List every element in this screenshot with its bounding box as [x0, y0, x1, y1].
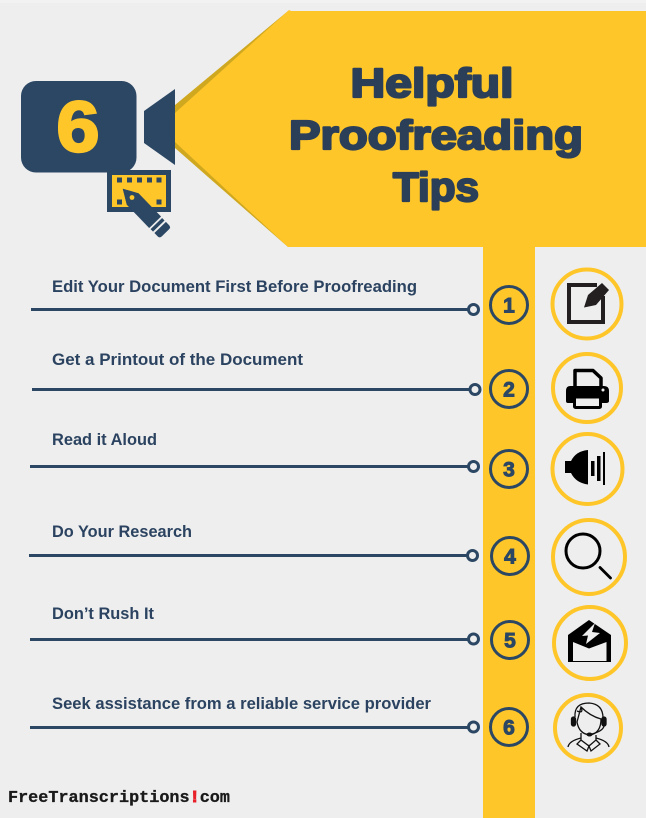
icon: edit note: [552, 270, 622, 338]
tip 2: [32, 350, 480, 394]
number badge 1: 1: [503, 294, 515, 318]
title: Proofreading: [289, 112, 583, 158]
number badge 6: [490, 708, 528, 746]
yellow vertical column: [483, 240, 535, 818]
number badge 6: 6: [503, 716, 515, 740]
icon: speaker: [552, 434, 622, 504]
icon: printer: [553, 354, 621, 422]
icon: video camera with number 6: 6: [56, 88, 100, 168]
icon: envelope with lightning: [554, 607, 626, 679]
number badge 4: 4: [504, 546, 516, 568]
number badge 1: [490, 286, 528, 324]
number badge 3: 3: [503, 458, 515, 482]
tip 1: Edit Your Document First Before Proofreading: [52, 277, 417, 296]
tip 5: Don’t Rush It: [52, 604, 154, 623]
icon: support agent: [555, 695, 621, 761]
number badge 4: [492, 538, 528, 574]
tip 4: [29, 522, 478, 560]
tip 4: Do Your Research: [52, 522, 192, 541]
tip 5: [30, 604, 478, 644]
number badge 5: [492, 622, 528, 658]
title: [289, 60, 583, 210]
icon: video camera with number 6: [21, 81, 175, 172]
tip 6: Seek assistance from a reliable service provider: [52, 694, 431, 713]
tip 3: Read it Aloud: [52, 430, 157, 449]
number badge 5: 5: [504, 630, 516, 652]
icon: magnifier: [553, 520, 625, 594]
number badge 3: [490, 450, 528, 488]
title: Helpful: [350, 60, 514, 106]
tip 2: Get a Printout of the Document: [52, 350, 303, 369]
number badge 2: [490, 370, 528, 408]
number badge 2: 2: [503, 378, 515, 402]
footer brand: FreeTranscriptions!com: [8, 789, 230, 808]
icon: film strip with pencil: [107, 170, 171, 238]
tip 3: [30, 430, 478, 472]
title banner: [175, 10, 646, 247]
tip 6: [30, 694, 478, 732]
title: Tips: [393, 164, 479, 210]
tip 1: [31, 277, 478, 314]
